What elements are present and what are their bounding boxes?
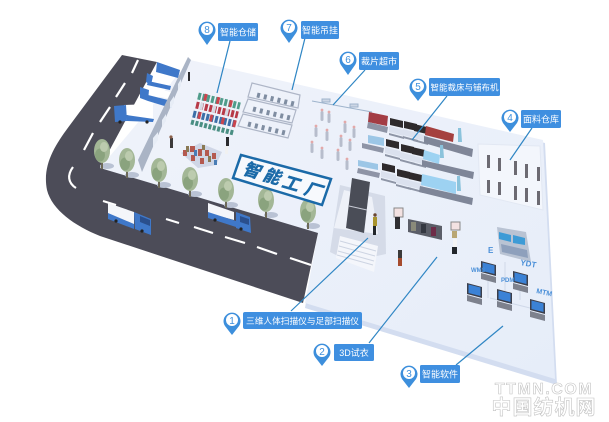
cut-piece supermarket <box>310 99 372 170</box>
smart storage racks <box>191 96 240 133</box>
marker 8: 智能仓储 <box>198 22 258 45</box>
road <box>46 55 318 303</box>
floor platform <box>100 60 557 385</box>
marker 3: 智能软件: 智能软件 <box>422 368 458 380</box>
marker 4: 面料仓库: 4 <box>507 113 513 124</box>
trees <box>94 139 320 229</box>
marker 3: 智能软件: 3 <box>406 369 412 380</box>
marker 7: 智能吊挂: 智能吊挂 <box>302 24 338 36</box>
smart hanging racks <box>238 83 300 138</box>
watermark: 中国纺机网 <box>492 396 596 419</box>
smart software network: PDM <box>501 278 514 284</box>
factory sign: 工 <box>279 173 305 195</box>
marker 8: 智能仓储: 智能仓储 <box>220 26 256 38</box>
3D try-on stations <box>394 208 460 266</box>
marker 4: 面料仓库: 面料仓库 <box>523 114 559 124</box>
marker 8: 智能仓储: 8 <box>204 25 210 36</box>
smart software network: YDT <box>520 258 537 270</box>
factory sign: 厂 <box>301 180 327 202</box>
goods pile and workers <box>169 72 229 168</box>
marker 6: 裁片超市: 6 <box>345 55 351 66</box>
fabric warehouse <box>478 144 543 210</box>
marker 6: 裁片超市 <box>339 52 399 75</box>
marker 1: 三维人体扫描仪与足部扫描仪 <box>223 312 362 335</box>
marker 1: 三维人体扫描仪与足部扫描仪: 三维人体扫描仪与足部扫描仪 <box>246 315 359 326</box>
fence wall <box>138 57 191 172</box>
marker 1: 三维人体扫描仪与足部扫描仪: 1 <box>229 316 235 327</box>
watermark: TTMN.COM <box>495 381 593 398</box>
smart software network <box>467 227 553 321</box>
factory sign: 智 <box>240 160 266 182</box>
road markings <box>69 60 311 265</box>
trucks at dock <box>114 62 180 124</box>
smart software network: E <box>488 246 494 255</box>
marker 2: 3D试衣: 2 <box>319 347 325 358</box>
leader lines <box>217 38 532 365</box>
factory sign: 能 <box>260 166 286 188</box>
smart cutting beds and spreading machines <box>357 112 474 205</box>
marker 5: 智能裁床与铺布机: 智能裁床与铺布机 <box>430 82 499 92</box>
marker 5: 智能裁床与铺布机 <box>410 78 500 101</box>
factory sign <box>233 155 331 205</box>
marker 7: 智能吊挂 <box>280 20 339 43</box>
smart software network: WMS <box>471 268 486 274</box>
watermark <box>492 381 596 419</box>
marker 2: 3D试衣 <box>314 344 374 366</box>
road trucks <box>108 203 251 235</box>
3D body scanner platform <box>330 178 386 272</box>
marker 6: 裁片超市: 裁片超市 <box>361 56 397 66</box>
marker 2: 3D试衣: 3D试衣 <box>339 347 369 358</box>
marker 7: 智能吊挂: 7 <box>286 23 292 34</box>
smart software network: MTM <box>536 288 553 298</box>
marker 5: 智能裁床与铺布机: 5 <box>415 82 421 93</box>
marker 3: 智能软件 <box>400 365 460 388</box>
marker 4: 面料仓库 <box>502 110 561 132</box>
